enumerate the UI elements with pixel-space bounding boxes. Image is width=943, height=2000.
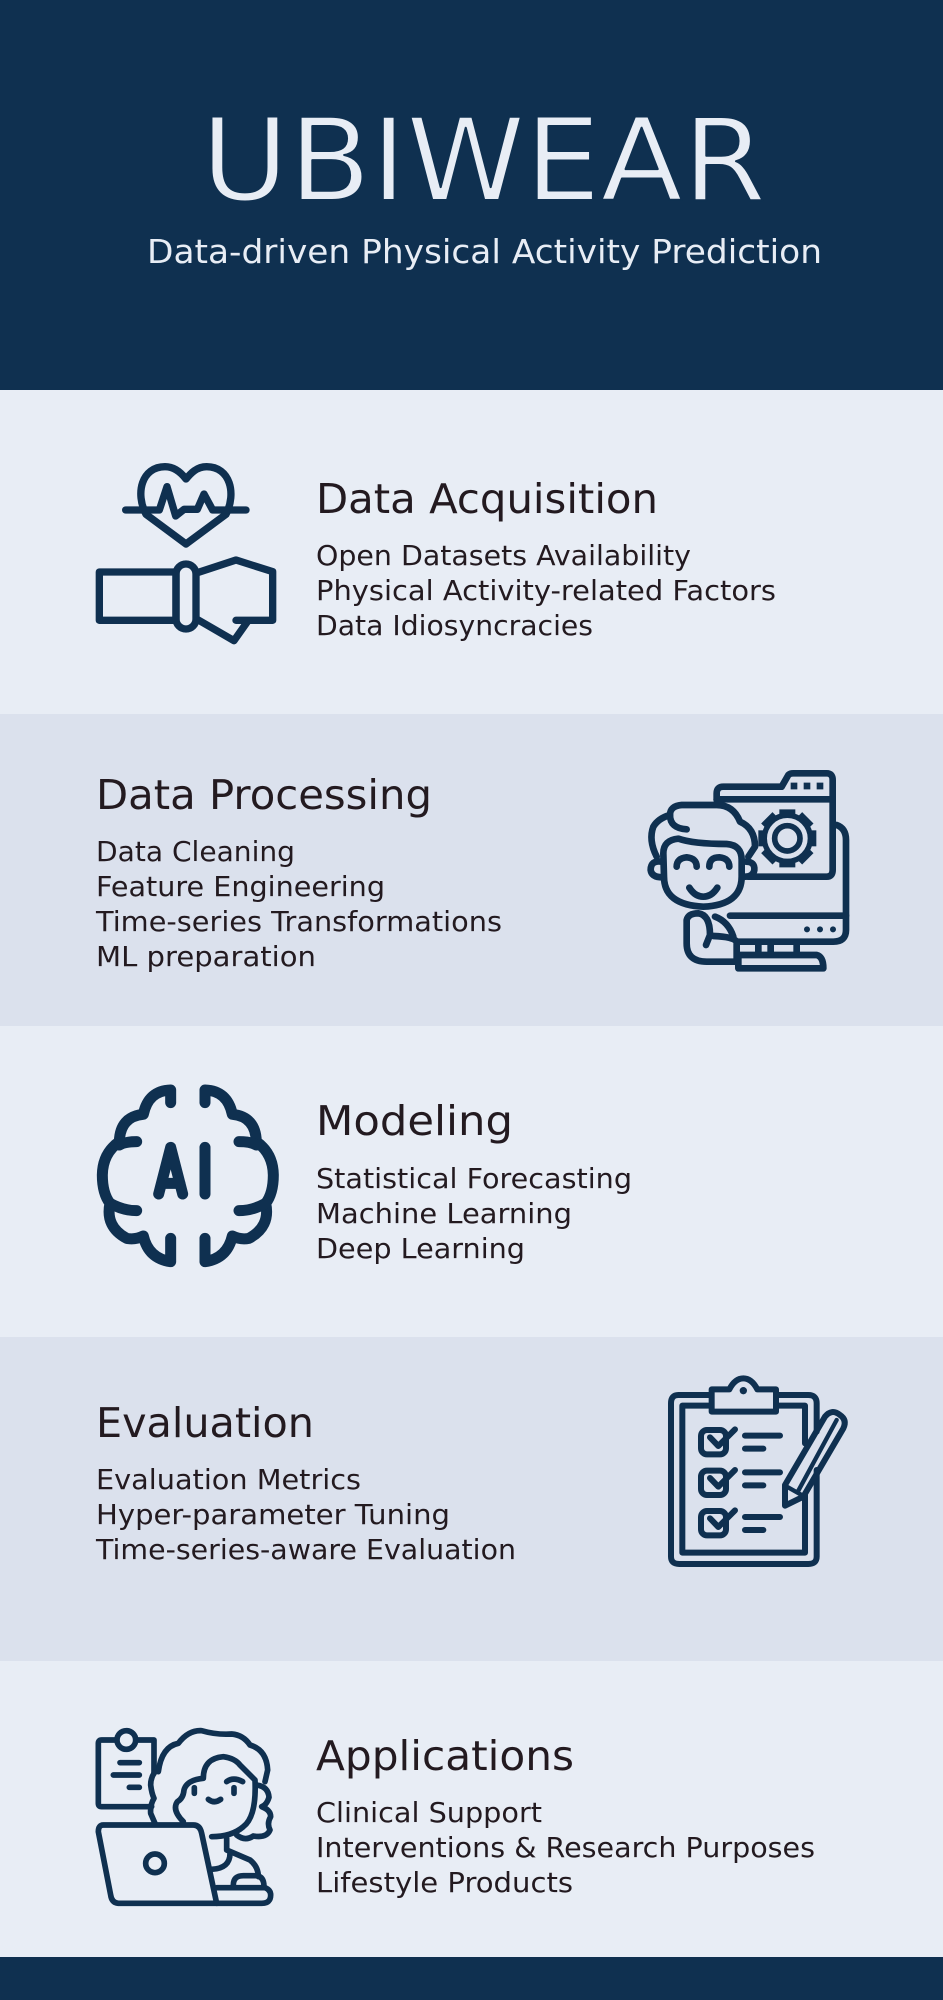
panel: data acquisition: [0, 390, 943, 714]
heading: data processing: Data Processing: [96, 771, 432, 819]
list: data processing: Feature Engineering: [96, 870, 385, 903]
list: evaluation: Time-series-aware Evaluation: [95, 1533, 516, 1566]
icon: woman with laptop and notes: [98, 1731, 271, 1903]
list: data acquisition: [316, 539, 776, 642]
panel: evaluation: [0, 1337, 943, 1661]
list: evaluation: Evaluation Metrics: [96, 1463, 361, 1496]
list: data processing: Time-series Transformations: [95, 905, 502, 938]
list: modeling: [316, 1162, 632, 1265]
list: modeling: Statistical Forecasting: [316, 1162, 632, 1195]
heading: evaluation: Evaluation: [96, 1399, 314, 1447]
header panel: [0, 0, 943, 390]
list: modeling: Machine Learning: [316, 1197, 572, 1230]
list: data acquisition: Data Idiosyncracies: [316, 609, 593, 642]
list: applications: Interventions & Research Purposes: [316, 1831, 815, 1864]
list: evaluation: Hyper-parameter Tuning: [96, 1498, 450, 1531]
heading: modeling: Modeling: [316, 1097, 513, 1145]
icon: clipboard checklist with pencil: [671, 1378, 845, 1564]
list: applications: [316, 1796, 815, 1899]
list: data processing: ML preparation: [96, 940, 316, 973]
panel: applications: [0, 1661, 943, 1957]
title: UBIWEAR: [201, 94, 766, 227]
list: data processing: [95, 835, 502, 973]
subtitle: Data-driven Physical Activity Prediction: [147, 232, 822, 271]
heading: data acquisition: Data Acquisition: [316, 475, 658, 523]
list: data acquisition: Physical Activity-related Factors: [316, 574, 776, 607]
panel: modeling: [0, 1026, 943, 1337]
list: data processing: Data Cleaning: [96, 835, 295, 868]
icon: person with computer and gear: [651, 773, 846, 968]
heading: applications: Applications: [316, 1732, 574, 1780]
list: applications: Lifestyle Products: [316, 1866, 573, 1899]
list: applications: Clinical Support: [316, 1796, 542, 1829]
list: modeling: Deep Learning: [316, 1232, 525, 1265]
list: evaluation: [95, 1463, 516, 1566]
footer band: [0, 1957, 943, 2000]
panel: data processing: [0, 714, 943, 1026]
list: data acquisition: Open Datasets Availability: [316, 539, 691, 572]
icon: heart rate and wristband: [99, 467, 273, 641]
icon: AI brain: [102, 1090, 273, 1262]
